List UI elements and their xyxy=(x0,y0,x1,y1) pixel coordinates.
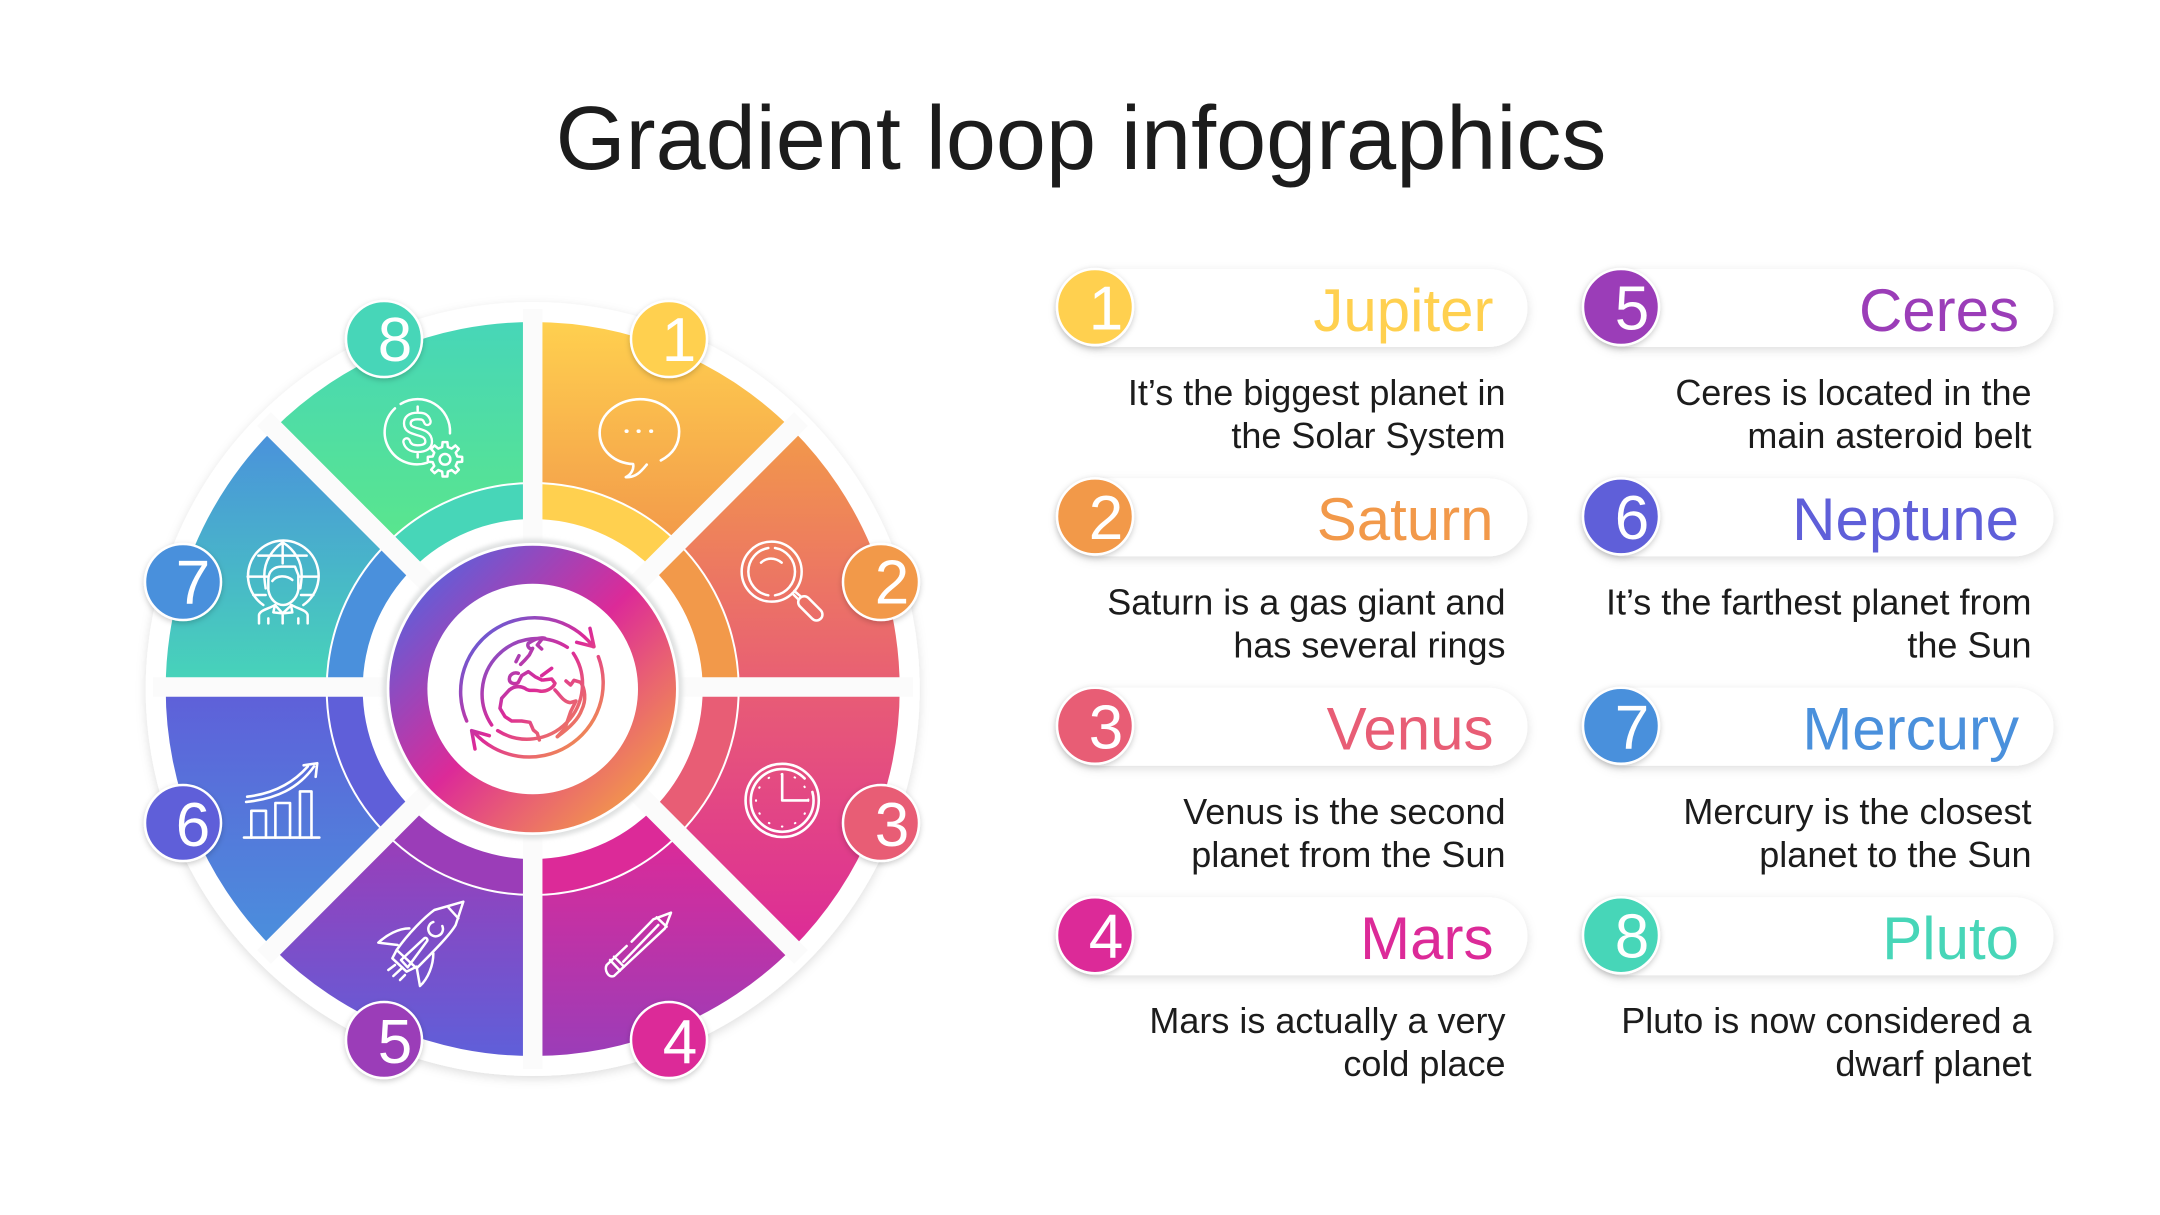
badge 2 xyxy=(843,544,919,620)
badge 8: 8 xyxy=(378,306,412,375)
legend item 1: Jupiter xyxy=(1057,269,1528,456)
legend item 2: Saturn: Saturn xyxy=(1317,486,1494,553)
legend item 6: Neptune: Neptune xyxy=(1792,486,2019,553)
legend item 5: Ceres: 5 xyxy=(1615,274,1649,344)
legend item 7: Mercury: Mercury is the closest xyxy=(1683,791,2032,832)
badge 6 xyxy=(145,785,221,861)
badge 3: 3 xyxy=(875,791,909,860)
icon: person with globe xyxy=(248,541,319,623)
central ring xyxy=(383,539,683,839)
legend item 8: Pluto: Pluto xyxy=(1882,905,2019,972)
legend item 8: Pluto: dwarf planet xyxy=(1835,1043,2032,1084)
badge 3 xyxy=(843,785,919,861)
sector 4 xyxy=(533,809,792,1056)
badge 7: 7 xyxy=(176,548,210,618)
legend item 5: Ceres: main asteroid belt xyxy=(1747,415,2032,456)
sector 1 xyxy=(533,322,792,569)
legend item 6: Neptune: the Sun xyxy=(1907,624,2032,665)
legend item 7: Mercury: planet to the Sun xyxy=(1759,834,2032,875)
legend item 5: Ceres: Ceres xyxy=(1859,277,2019,344)
legend item 3: Venus: Venus xyxy=(1327,696,1494,763)
legend item 3: Venus: Venus is the second xyxy=(1183,791,1506,832)
badge 5 xyxy=(346,1002,422,1078)
badge 2: 2 xyxy=(875,548,909,618)
legend item 3: Venus xyxy=(1057,688,1528,875)
wheel sectors xyxy=(166,322,900,1056)
legend item 7: Mercury: 7 xyxy=(1615,693,1649,762)
wheel backing disc xyxy=(146,302,920,1076)
legend item 8: Pluto: Pluto is now considered a xyxy=(1621,1000,2032,1041)
legend item 2: Saturn xyxy=(1057,478,1528,665)
legend item 5: Ceres xyxy=(1583,269,2054,456)
badge 4: 4 xyxy=(663,1008,697,1077)
icon: money and gear xyxy=(385,399,462,476)
legend item 7: Mercury: Mercury xyxy=(1802,696,2019,763)
sector 7 xyxy=(166,430,412,689)
legend item 6: Neptune: 6 xyxy=(1615,484,1649,553)
legend item 3: Venus: planet from the Sun xyxy=(1191,834,1506,875)
legend item 4: Mars: Mars is actually a very xyxy=(1149,1000,1506,1041)
badge 4 xyxy=(631,1002,707,1078)
icon: pencil xyxy=(606,913,671,976)
legend item 7: Mercury xyxy=(1583,688,2054,875)
legend item 1: Jupiter: It’s the biggest planet in xyxy=(1128,372,1506,413)
number badges xyxy=(145,301,919,1078)
legend item 4: Mars: Mars xyxy=(1360,905,1494,972)
badge 6: 6 xyxy=(176,791,210,860)
icon: rocket xyxy=(378,902,463,986)
sector icons xyxy=(244,399,825,986)
icon: clock xyxy=(746,764,819,837)
icon: magnifying glass xyxy=(742,542,825,623)
sector 3 xyxy=(653,689,900,948)
badge 8 xyxy=(346,301,422,377)
icon: speech bubble xyxy=(600,399,679,477)
badge 1: 1 xyxy=(662,306,696,375)
legend item 3: Venus: 3 xyxy=(1089,693,1123,762)
legend item 6: Neptune xyxy=(1583,478,2054,665)
legend item 1: Jupiter: Jupiter xyxy=(1313,277,1494,344)
badge 5: 5 xyxy=(378,1008,412,1077)
legend item 6: Neptune: It’s the farthest planet from xyxy=(1606,581,2032,622)
legend item 1: Jupiter: the Solar System xyxy=(1231,415,1506,456)
legend item 2: Saturn: 2 xyxy=(1089,484,1123,553)
badge 7 xyxy=(145,544,221,620)
legend item 8: Pluto: 8 xyxy=(1615,903,1649,972)
legend item 2: Saturn: Saturn is a gas giant and xyxy=(1107,581,1506,622)
sector 8 xyxy=(273,322,533,569)
sector 6 xyxy=(166,689,412,948)
legend item 4: Mars: cold place xyxy=(1343,1043,1506,1084)
legend item 4: Mars: 4 xyxy=(1089,903,1123,972)
icon: globe with loop arrows xyxy=(461,618,603,757)
title: Gradient loop infographics xyxy=(556,89,1606,189)
sector 5 xyxy=(273,809,533,1056)
legend item 4: Mars xyxy=(1057,897,1528,1084)
icon: growth chart xyxy=(244,763,319,838)
loop wheel xyxy=(145,301,920,1078)
legend item 8: Pluto xyxy=(1583,897,2054,1084)
badge 1 xyxy=(631,301,707,377)
legend item 5: Ceres: Ceres is located in the xyxy=(1675,372,2032,413)
legend item 1: Jupiter: 1 xyxy=(1089,274,1123,344)
legend item 2: Saturn: has several rings xyxy=(1233,624,1506,665)
sector 2 xyxy=(653,430,900,689)
